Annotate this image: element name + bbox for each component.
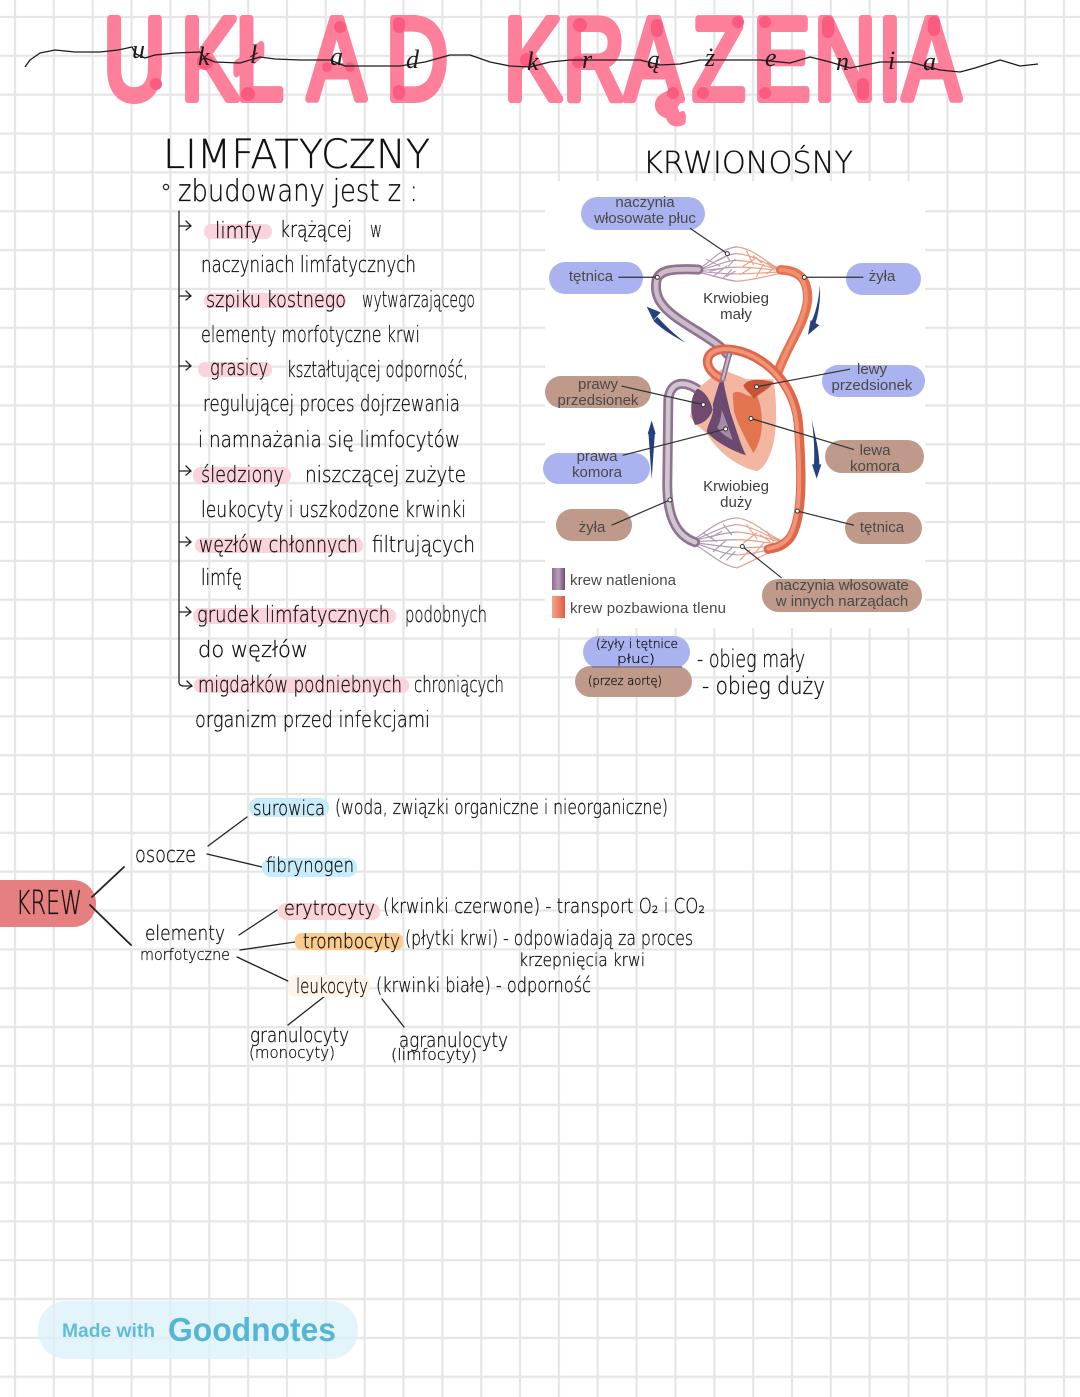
diagram labels: duży <box>720 494 752 511</box>
callout: circuit key: płuc) <box>617 652 655 666</box>
list text: organizm przed infekcjami <box>195 708 430 733</box>
watermark badge: Made with Goodnotes: Goodnotes <box>168 1311 336 1348</box>
list text: zbudowany jest z : <box>178 174 418 209</box>
diagram labels: przedsionek <box>558 392 639 409</box>
diagram labels: komora <box>572 464 623 481</box>
mind map text: krzepnięcia krwi <box>519 950 645 971</box>
legend: krew pozbawiona tlenu <box>570 600 726 617</box>
label pills <box>543 197 925 484</box>
vena cava <box>667 384 700 542</box>
diagram labels: włosowate płuc <box>593 210 696 227</box>
diagram labels: lewa <box>860 442 891 459</box>
left atrium <box>743 380 773 399</box>
mind map text: (krwinki czerwone) - transport O₂ i CO₂ <box>383 894 705 918</box>
list text <box>178 174 504 733</box>
mind map text: osocze <box>135 843 196 868</box>
list text: grasicy <box>210 356 268 381</box>
list text: szpiku kostnego <box>206 288 346 313</box>
mind map text: trombocyty <box>303 929 400 953</box>
systemic capillaries <box>692 518 782 568</box>
diagram labels: prawy <box>578 376 619 393</box>
mind map text: (krwinki białe) - odporność <box>376 973 591 997</box>
callout: circuit key <box>575 636 825 700</box>
list text: i namnażania się limfocytów <box>198 428 460 453</box>
mind map text: morfotyczne <box>140 945 230 964</box>
list text: wytwarzającego <box>362 288 475 313</box>
list text: elementy morfotyczne krwi <box>201 323 420 348</box>
list text: chroniących <box>414 673 504 698</box>
list text: limfy <box>215 219 262 244</box>
diagram labels: lewy <box>857 361 887 378</box>
diagram labels: Krwiobieg <box>703 290 769 307</box>
leader lines and dots <box>612 228 863 578</box>
diagram labels <box>558 194 913 610</box>
mind map text: (limfocyty) <box>391 1045 477 1064</box>
list text: filtrujących <box>372 533 475 558</box>
diagram labels: żyła <box>579 519 606 536</box>
list bracket and arrows <box>179 211 192 689</box>
list text: krążącej <box>280 218 352 243</box>
title: UKŁAD KRĄZENIA <box>25 0 1038 124</box>
diagram labels: Krwiobieg <box>703 478 769 495</box>
callout: circuit key: - obieg mały <box>697 645 805 673</box>
pulmonary trunk <box>723 354 729 379</box>
legend: krew natleniona <box>570 572 677 589</box>
diagram labels: żyła <box>869 268 896 285</box>
pulmonary capillaries <box>697 247 782 281</box>
list text: migdałków podniebnych <box>198 673 402 698</box>
list text: naczyniach limfatycznych <box>201 253 416 278</box>
list text: regulującej proces dojrzewania <box>203 392 460 417</box>
cursive subtitle over title: układkrążenia <box>132 35 936 76</box>
list text: leukocyty i uszkodzone krwinki <box>201 498 466 523</box>
pulmonary artery <box>656 269 727 354</box>
right atrium <box>691 389 713 425</box>
list text: limfę <box>201 566 242 591</box>
mind map text: granulocyty <box>250 1023 349 1047</box>
watermark badge: Made with Goodnotes <box>38 1301 358 1359</box>
mind map text: surowica <box>253 796 325 820</box>
mind map text: elementy <box>145 921 225 945</box>
diagram labels: tętnica <box>860 519 905 536</box>
flow arrows <box>647 285 821 479</box>
root node: KREW <box>0 880 96 927</box>
bullet <box>163 184 169 190</box>
list text: podobnych <box>405 603 487 628</box>
panel: lymphatic system list <box>163 174 504 733</box>
diagram labels: naczynia <box>615 194 675 211</box>
heading: KRWIONOŚNY: KRWIONOŚNY <box>643 144 853 181</box>
diagram labels: naczynia włosowate <box>775 577 909 594</box>
diagram labels: komora <box>850 458 901 475</box>
diagram vessels and heart <box>647 247 821 568</box>
mind map text: erytrocyty <box>284 896 375 920</box>
list text: do węzłów <box>198 638 308 663</box>
list text: węzłów chłonnych <box>199 533 358 558</box>
mind map text: agranulocyty <box>399 1028 508 1052</box>
diagram labels: mały <box>720 306 752 323</box>
mind map text: (woda, związki organiczne i nieorganiczne) <box>335 795 668 819</box>
panel: blood mind map <box>0 795 705 1064</box>
aorta <box>707 349 801 549</box>
root node: KREW: KREW <box>16 883 82 922</box>
heart body <box>690 369 776 471</box>
mind map text: leukocyty <box>296 974 368 998</box>
pulmonary vein <box>777 270 808 374</box>
callout: circuit key: (przez aortę) <box>588 674 662 688</box>
list text: w <box>370 218 382 243</box>
watermark badge: Made with Goodnotes: Made with <box>62 1321 155 1342</box>
left ventricle <box>733 392 762 453</box>
mind map text: fibrynogen <box>266 853 354 877</box>
mind map text: (płytki krwi) - odpowiadają za proces <box>405 926 693 950</box>
callout: circuit key: - obieg duży <box>702 672 825 700</box>
mind map text <box>135 795 705 1064</box>
mind map branches <box>90 817 404 1027</box>
diagram labels: przedsionek <box>832 377 913 394</box>
highlights on key terms <box>193 224 409 693</box>
panel: circulatory diagram <box>543 181 925 628</box>
list text: grudek limfatycznych <box>197 603 390 628</box>
list text: kształtującej odporność, <box>287 358 468 383</box>
callout: circuit key: (żyły i tętnice <box>596 637 678 651</box>
term highlights <box>249 798 403 997</box>
heading: LIMFATYCZNY: LIMFATYCZNY <box>163 132 430 178</box>
diagram labels: tętnica <box>569 268 614 285</box>
list text: śledziony <box>201 463 284 488</box>
diagram labels: w innych narządach <box>775 593 908 610</box>
mind map text: (monocyty) <box>249 1043 335 1062</box>
right ventricle <box>707 373 746 455</box>
list text: niszczącej zużyte <box>305 463 466 488</box>
legend <box>552 568 726 618</box>
diagram labels: prawa <box>577 448 618 465</box>
